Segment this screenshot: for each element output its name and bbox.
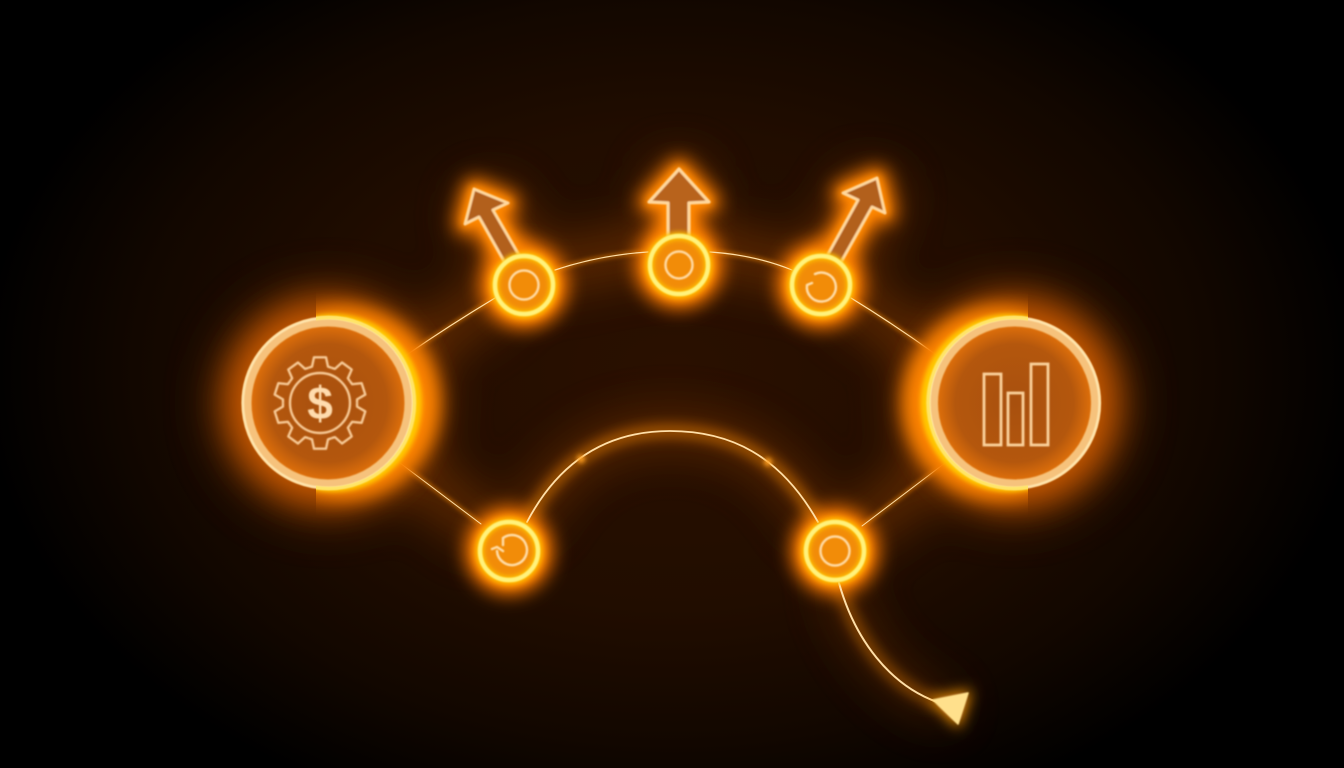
node: upper centre ring [650,236,708,294]
node: upper right with cycle icon [792,256,850,314]
node glow layer [465,221,879,595]
lower arch connector [527,431,818,522]
icon: gear with dollar sign [273,357,367,449]
arrow: upper left [465,189,519,263]
connector lines [400,252,945,526]
node: upper left ring [495,256,553,314]
icon: bar chart [984,364,1048,445]
ambient halo [238,190,1104,708]
arrow: upper right [827,178,885,264]
icon: gear with dollar sign: $ [307,377,333,429]
panel: left hub with gear and dollar icon [226,301,440,505]
arrow: upper centre [649,169,709,245]
panel: right hub with bar chart icon [902,301,1116,505]
node: lower right ring [806,522,864,580]
exit arrow curve with triangle head [839,583,968,724]
node: lower left with cycle icon [480,522,538,580]
